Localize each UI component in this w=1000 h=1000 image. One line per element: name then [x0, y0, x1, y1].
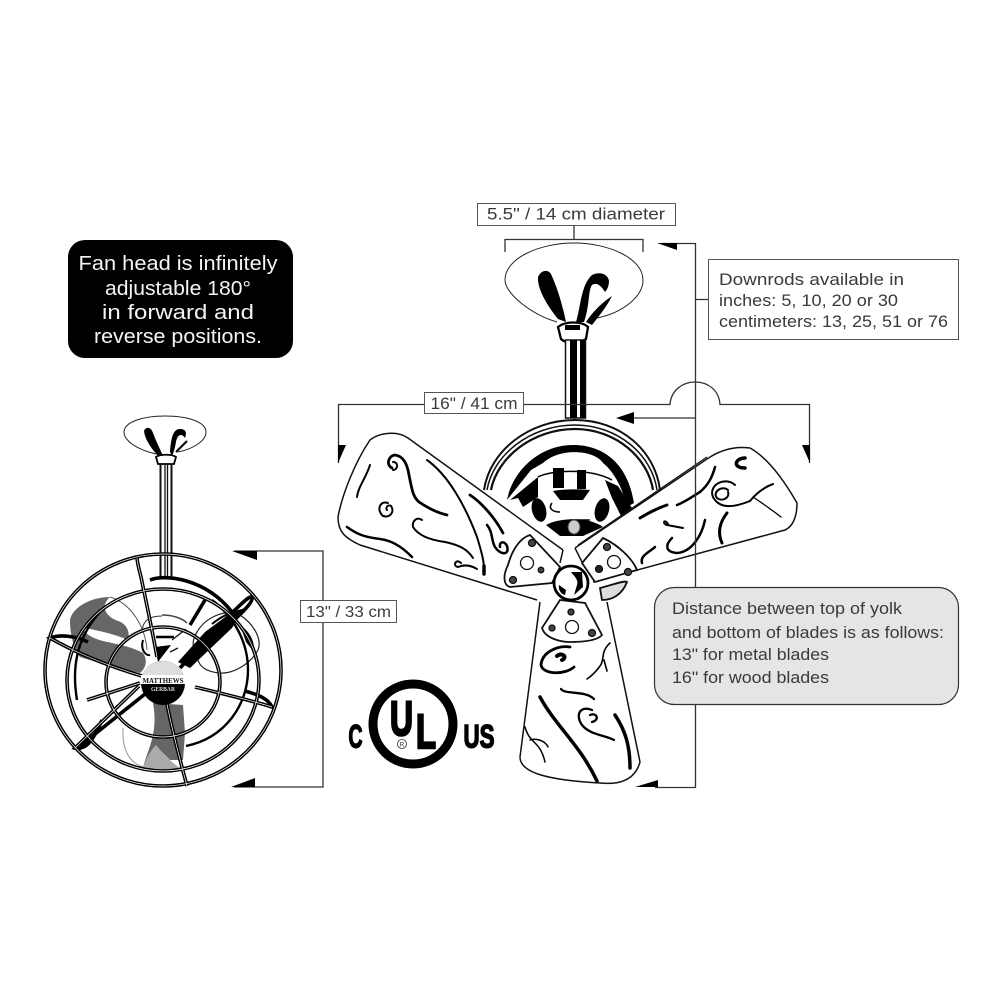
- dimension: 16 in / 41 cm: [338, 382, 810, 463]
- blade: bottom: [520, 602, 640, 783]
- callout: fan head adjustable: Fan head is infinitely: [78, 253, 278, 275]
- note: distance yolk to blades: Distance between top of yolk: [672, 600, 903, 618]
- note: distance yolk to blades: and bottom of blades is as follows:: [672, 624, 944, 642]
- note: downrods available: Downrods available in: [719, 271, 904, 289]
- callout: fan head adjustable: reverse positions.: [94, 326, 262, 348]
- dimension: 13 in / 33 cm: 13" / 33 cm: [306, 604, 391, 621]
- hub badge: GERBAR: [151, 687, 176, 693]
- small fan illustration: [45, 416, 281, 786]
- note: downrods available: inches: 5, 10, 20 or 30: [719, 292, 898, 310]
- UL certification mark: U: [390, 693, 413, 746]
- dimension: 13 in / 33 cm: [231, 551, 396, 787]
- canopy: [505, 243, 643, 343]
- downrod: [160, 464, 172, 577]
- UL certification mark: L: [416, 706, 436, 759]
- callout: fan head adjustable: in forward and: [102, 302, 254, 324]
- dimension: 5.5 in / 14 cm diameter: 5.5" / 14 cm diameter: [487, 206, 666, 224]
- cage highlight: [45, 554, 281, 786]
- wire cage: [45, 554, 281, 786]
- blade: grey left: [70, 597, 147, 673]
- blade: right: [178, 608, 259, 673]
- blade: left: [338, 433, 563, 600]
- note: downrods available: centimeters: 13, 25, 51 or 76: [719, 313, 948, 331]
- motor detail: [142, 615, 187, 662]
- blade: grey bottom: [123, 703, 185, 771]
- note: distance yolk to blades: 16" for wood blades: [672, 669, 829, 687]
- blade: right: [575, 447, 797, 582]
- callout: fan head adjustable: [68, 240, 293, 358]
- hub badge: [141, 661, 185, 705]
- center hub: [554, 566, 588, 600]
- blade irons: [504, 535, 637, 642]
- UL certification mark: US: [464, 718, 494, 754]
- large fan illustration: [338, 243, 797, 783]
- note: distance yolk to blades: 13" for metal blades: [672, 646, 829, 664]
- downrod: [566, 340, 586, 418]
- dimension: 5.5 in / 14 cm diameter: [478, 204, 676, 252]
- canopy: [124, 416, 206, 464]
- dimension: vertical downrod line with arrows: [616, 243, 708, 788]
- UL certification mark: R: [400, 742, 405, 748]
- dimension: 16 in / 41 cm: 16" / 41 cm: [430, 395, 518, 413]
- note: distance yolk to blades: [654, 588, 958, 704]
- UL certification mark: C: [348, 718, 362, 754]
- note: downrods available: [708, 260, 958, 340]
- callout: fan head adjustable: adjustable 180°: [105, 278, 251, 300]
- motor housing: [484, 420, 660, 536]
- hub badge: MATTHEWS: [142, 676, 184, 685]
- UL certification mark: [348, 684, 494, 764]
